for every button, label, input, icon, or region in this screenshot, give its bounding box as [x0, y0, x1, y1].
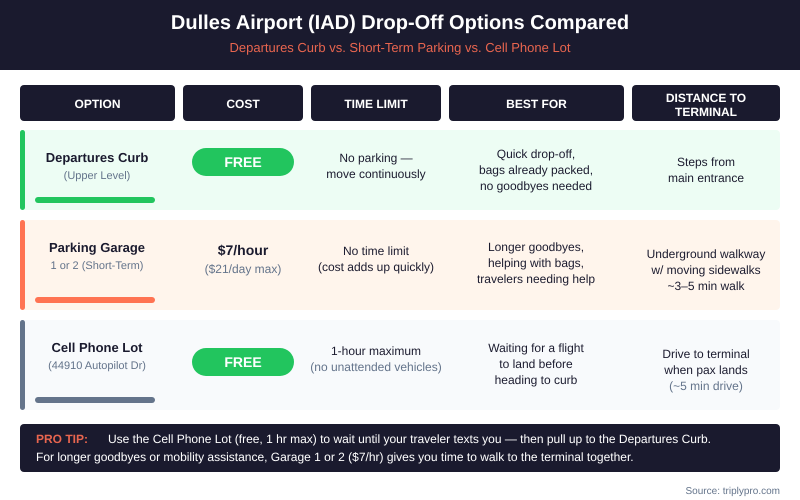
row: cell phone lot: heading to curb — [495, 373, 578, 387]
pro tip callout: PRO TIP: — [36, 432, 88, 446]
row: parking garage: helping with bags, — [488, 256, 584, 270]
row: departures curb: Steps from — [677, 155, 735, 169]
table header row: TIME LIMIT — [344, 97, 408, 111]
row: departures curb: bags already packed, — [479, 163, 593, 177]
row: cell phone lot: to land before — [499, 357, 573, 371]
row: parking garage: ~3–5 min walk — [667, 279, 746, 293]
row: parking garage: ($21/day max) — [205, 262, 281, 276]
row: parking garage: Parking Garage — [49, 240, 145, 255]
table header row: OPTION — [74, 97, 121, 111]
title banner: Dulles Airport (IAD) Drop-Off Options Compared — [171, 12, 629, 34]
source note: Source: triplypro.com — [686, 486, 780, 497]
row: parking garage: $7/hour — [218, 242, 269, 258]
row: departures curb — [20, 130, 780, 210]
row: departures curb: Departures Curb — [46, 150, 148, 165]
row: departures curb: FREE — [224, 154, 262, 170]
row: cell phone lot: 1-hour maximum — [331, 344, 421, 358]
row: departures curb: main entrance — [668, 171, 744, 185]
row: parking garage: 1 or 2 (Short-Term) — [51, 260, 143, 272]
row: cell phone lot: (44910 Autopilot Dr) — [48, 360, 146, 372]
table header row: COST — [226, 97, 260, 111]
row: parking garage: Underground walkway — [647, 247, 765, 261]
table header row: DISTANCE TO — [666, 91, 746, 105]
pro tip callout: For longer goodbyes or mobility assistance, Garage 1 or 2 ($7/hr) gives you time to walk to the terminal together. — [36, 450, 634, 464]
table header row: BEST FOR — [506, 97, 567, 111]
pro tip callout — [20, 424, 780, 472]
row: cell phone lot — [20, 320, 780, 410]
pro tip callout: Use the Cell Phone Lot (free, 1 hr max) to wait until your traveler texts you — then pull up to the Departures Curb. — [108, 432, 711, 446]
row: cell phone lot: Drive to terminal — [662, 347, 750, 361]
row: parking garage — [20, 220, 780, 310]
title banner — [0, 0, 800, 70]
row: departures curb: Quick drop-off, — [497, 147, 575, 161]
row: cell phone lot: (~5 min drive) — [669, 379, 743, 393]
row: departures curb: (Upper Level) — [64, 170, 130, 182]
row: cell phone lot: Cell Phone Lot — [52, 340, 143, 355]
row: parking garage: w/ moving sidewalks — [650, 263, 761, 277]
title banner: Departures Curb vs. Short-Term Parking vs. Cell Phone Lot — [229, 40, 571, 55]
row: departures curb: move continuously — [326, 167, 426, 181]
row: cell phone lot: FREE — [224, 354, 262, 370]
row: cell phone lot: (no unattended vehicles) — [310, 360, 442, 374]
table header row — [20, 85, 780, 121]
row: parking garage: travelers needing help — [477, 272, 595, 286]
row: departures curb: No parking — — [339, 151, 413, 165]
row: departures curb: no goodbyes needed — [480, 179, 592, 193]
row: cell phone lot: Waiting for a flight — [488, 341, 584, 355]
row: parking garage: (cost adds up quickly) — [318, 260, 434, 274]
row: parking garage: No time limit — [343, 244, 410, 258]
row: parking garage: Longer goodbyes, — [488, 240, 584, 254]
table header row: TERMINAL — [675, 105, 737, 119]
row: cell phone lot: when pax lands — [663, 363, 748, 377]
